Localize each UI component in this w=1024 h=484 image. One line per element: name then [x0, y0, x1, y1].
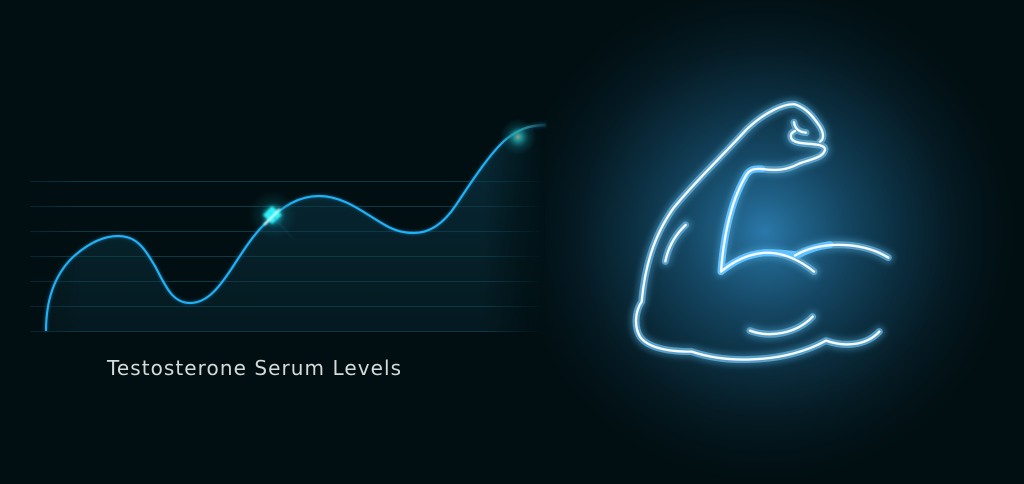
chart grid lines [30, 182, 540, 332]
arm blue tube [636, 104, 888, 360]
arm radial glow [510, 0, 1024, 484]
arm inner bright edge [721, 169, 830, 272]
chart caption: Testosterone Serum Levels [106, 356, 401, 380]
arm white core [636, 104, 888, 360]
curve glow [46, 125, 546, 331]
icon: flexed arm neon [636, 104, 888, 360]
curve line [46, 125, 546, 331]
flare: top point [500, 119, 536, 155]
flare: middle point [249, 191, 298, 244]
arm soft halo [636, 104, 888, 360]
line chart: testosterone levels [30, 119, 546, 332]
chart area fill [46, 125, 546, 331]
